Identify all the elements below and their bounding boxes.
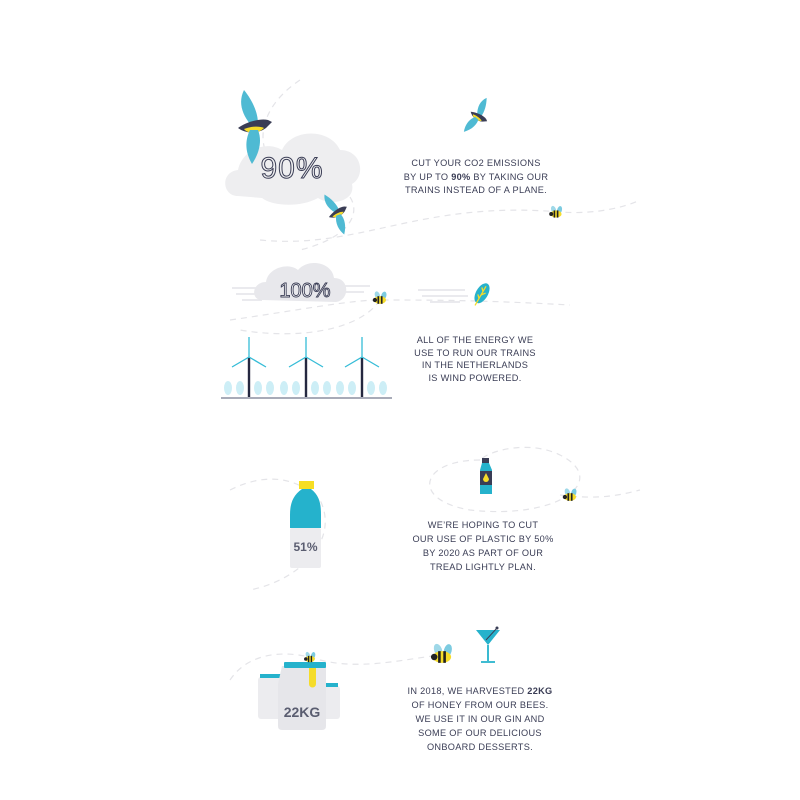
dashed flight paths [230,80,640,680]
text: wind: IS WIND POWERED. [428,373,522,383]
text: plastic: WE’RE HOPING TO CUT [428,520,538,530]
panel: 90% cloud [225,90,563,237]
text: wind: USE TO RUN OUR TRAINS [414,348,536,358]
text: wind [414,335,536,383]
text: honey: ONBOARD DESSERTS. [427,742,533,752]
turbines [232,337,379,397]
trees [224,381,387,395]
text: honey: SOME OF OUR DELICIOUS [418,728,542,738]
panel: plastic bottle [290,458,577,568]
icon: bee on jar [304,651,316,662]
text: honey: OF HONEY FROM OUR BEES. [412,700,548,710]
100% label: 100% [279,280,331,302]
text: CO2 emissions: CUT YOUR CO2 EMISSIONS [411,158,541,168]
90% label: 90% [260,152,324,185]
icon: leaf [470,281,493,308]
text: CO2 emissions: BY UP TO 90% BY TAKING OUR [404,172,548,182]
icon: bird bottom [321,189,355,237]
text: plastic [412,520,554,572]
icon: bee [549,205,563,218]
22KG label: 22KG [284,704,320,720]
51% label: 51% [293,540,318,554]
icon: bee [563,488,577,501]
text: CO2 emissions [404,158,548,195]
text: honey [408,686,552,752]
text: CO2 emissions: TRAINS INSTEAD OF A PLANE. [405,185,547,195]
text: honey: WE USE IT IN OUR GIN AND [415,714,545,724]
text: plastic: OUR USE OF PLASTIC BY 50% [412,534,554,544]
panel: honey jars [258,626,500,730]
panel: wind energy [221,263,493,398]
icon: cocktail glass [476,626,500,662]
text: wind: ALL OF THE ENERGY WE [417,335,533,345]
text: plastic: TREAD LIGHTLY PLAN. [430,562,536,572]
cloud [225,134,360,205]
text: plastic: BY 2020 AS PART OF OUR [423,548,543,558]
cloud [254,263,346,302]
text: honey: IN 2018, WE HARVESTED 22KG [408,686,552,696]
icon: small bottle [480,458,492,494]
text: wind: IN THE NETHERLANDS [422,360,528,370]
icon: big bee [431,643,453,663]
wind lines [232,286,468,302]
icon: bee [373,291,387,304]
icon: bird large [238,90,272,164]
icon: bird small top [458,96,498,139]
